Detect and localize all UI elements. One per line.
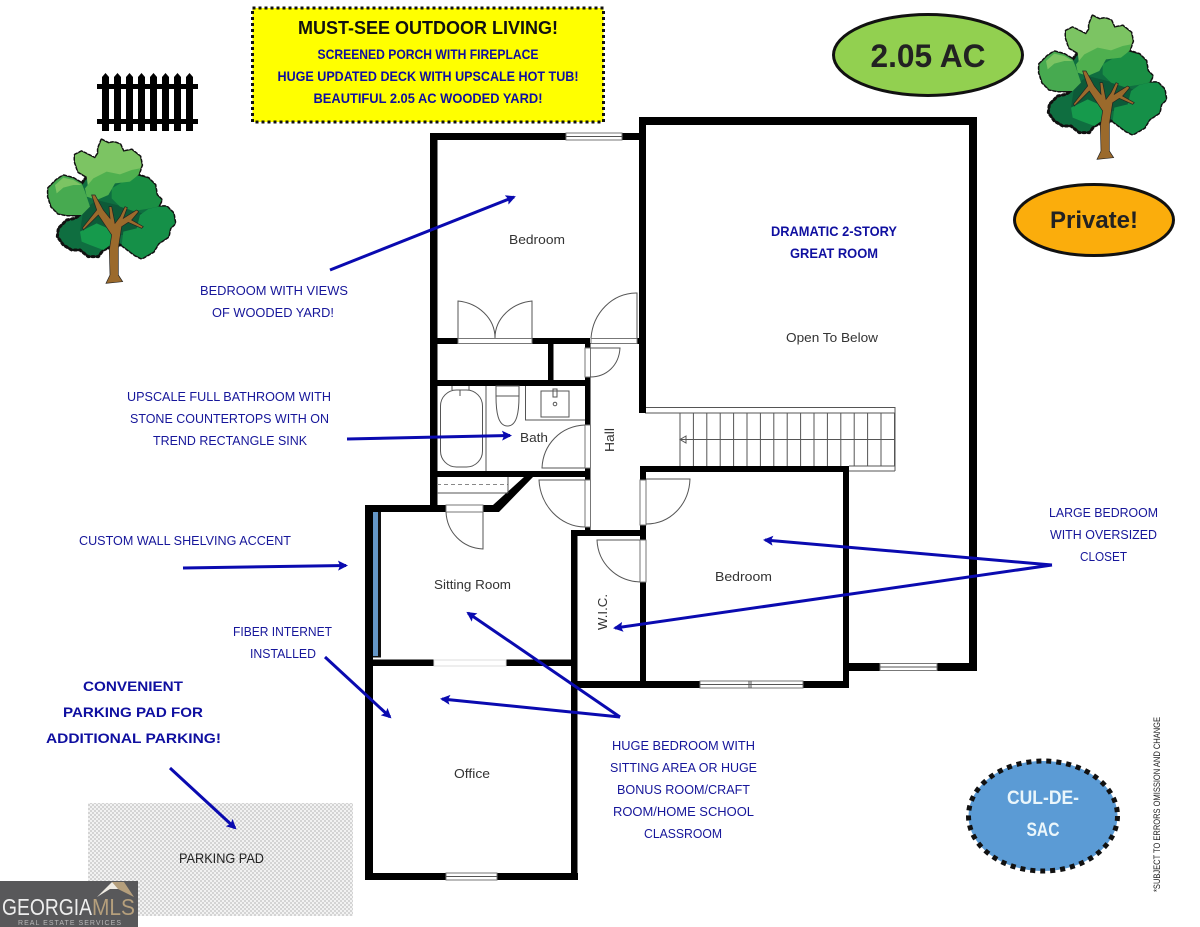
linen closet shelves [437, 477, 508, 493]
annotation: bathroom: UPSCALE FULL BATHROOM WITH [127, 389, 331, 404]
badge: 2.05 AC: 2.05 AC [870, 38, 986, 74]
annotation: huge bedroom: CLASSROOM [644, 826, 722, 841]
arrow: to walk-in closet [615, 565, 1052, 628]
annotation: bathroom [127, 389, 331, 448]
annotation: bedroom views [200, 283, 348, 320]
arrow: to shelving [183, 566, 346, 568]
annotation: fiber internet [233, 624, 332, 661]
arrow: to bath [347, 436, 510, 439]
logo: Georgia MLS [0, 881, 138, 927]
room label: bedroom: Bedroom [509, 232, 565, 247]
room label: hall: Hall [602, 428, 617, 452]
annotation: large bedroom [1049, 505, 1158, 564]
annotation: shelving: CUSTOM WALL SHELVING ACCENT [79, 533, 291, 548]
annotation: fiber internet: INSTALLED [250, 646, 316, 661]
icon: picket fence [97, 73, 198, 131]
annotation: parking: ADDITIONAL PARKING! [46, 730, 221, 746]
badge: Private: Private! [1050, 207, 1138, 234]
callout: must-see outdoor living: BEAUTIFUL 2.05 AC WOODED YARD! [314, 90, 542, 106]
panel: parking pad [88, 803, 353, 916]
icon: tree left [48, 140, 175, 283]
badge: cul-de-sac [968, 761, 1118, 871]
room label: sitting room: Sitting Room [434, 577, 511, 592]
heading: great room: DRAMATIC 2-STORY [771, 223, 898, 239]
arrow: to office area [442, 699, 620, 717]
arrow: to parking pad [170, 768, 235, 828]
floor plan [365, 117, 977, 880]
callout: must-see outdoor living: HUGE UPDATED DECK WITH UPSCALE HOT TUB! [278, 68, 578, 84]
annotation: huge bedroom: ROOM/HOME SCHOOL [613, 804, 754, 819]
callout: must-see outdoor living: SCREENED PORCH WITH FIREPLACE [318, 46, 538, 62]
annotation: parking: CONVENIENT [83, 678, 183, 694]
custom shelving accent [373, 512, 381, 658]
room label: bedroom 2: Bedroom [715, 569, 772, 584]
stairs [645, 408, 895, 471]
arrow: to bedroom 2 [765, 540, 1052, 565]
annotation: bedroom views: OF WOODED YARD! [212, 305, 334, 320]
panel: parking pad: PARKING PAD [179, 850, 264, 866]
annotation: large bedroom: CLOSET [1080, 549, 1127, 564]
windows and door openings [434, 133, 937, 880]
room label: bath: Bath [520, 430, 548, 445]
arrow: to office [325, 657, 390, 717]
room label: office: Office [454, 766, 490, 781]
annotation: parking: PARKING PAD FOR [63, 704, 203, 720]
walls [365, 117, 977, 880]
door swings [446, 293, 690, 582]
icon: tree right [1039, 16, 1166, 159]
annotation: bathroom: STONE COUNTERTOPS WITH ON [130, 411, 329, 426]
badge: cul-de-sac: SAC [1026, 820, 1060, 841]
annotation: huge bedroom [610, 738, 757, 841]
heading: great room: GREAT ROOM [790, 245, 878, 261]
annotation: huge bedroom: BONUS ROOM/CRAFT [617, 782, 750, 797]
room label: w.i.c.: W.I.C. [595, 594, 610, 630]
callout: must-see outdoor living [252, 8, 604, 122]
bathroom fixtures [440, 386, 585, 471]
annotation: huge bedroom: HUGE BEDROOM WITH [612, 738, 755, 753]
annotation: bathroom: TREND RECTANGLE SINK [153, 433, 307, 448]
disclaimer note: *SUBJECT TO ERRORS OMISSION AND CHANGE [1152, 717, 1163, 892]
logo: Georgia MLS: REAL ESTATE SERVICES [18, 920, 121, 927]
annotation: fiber internet: FIBER INTERNET [233, 624, 332, 639]
badge: 2.05 AC [834, 14, 1022, 96]
arrow: to sitting room [468, 613, 620, 717]
badge: cul-de-sac: CUL-DE- [1007, 788, 1079, 809]
annotation: huge bedroom: SITTING AREA OR HUGE [610, 760, 757, 775]
badge: Private [1014, 184, 1174, 256]
annotation: bedroom views: BEDROOM WITH VIEWS [200, 283, 348, 298]
annotation: parking [46, 678, 221, 746]
callout: must-see outdoor living: MUST-SEE OUTDOOR LIVING! [298, 18, 558, 38]
room label: open to below: Open To Below [786, 330, 879, 345]
logo: Georgia MLS: GEORGIA [2, 894, 93, 920]
annotation: large bedroom: WITH OVERSIZED [1050, 527, 1157, 542]
arrow: to bedroom [330, 197, 514, 270]
logo: Georgia MLS: MLS [92, 894, 135, 920]
annotation: large bedroom: LARGE BEDROOM [1049, 505, 1158, 520]
heading: great room [771, 223, 898, 261]
